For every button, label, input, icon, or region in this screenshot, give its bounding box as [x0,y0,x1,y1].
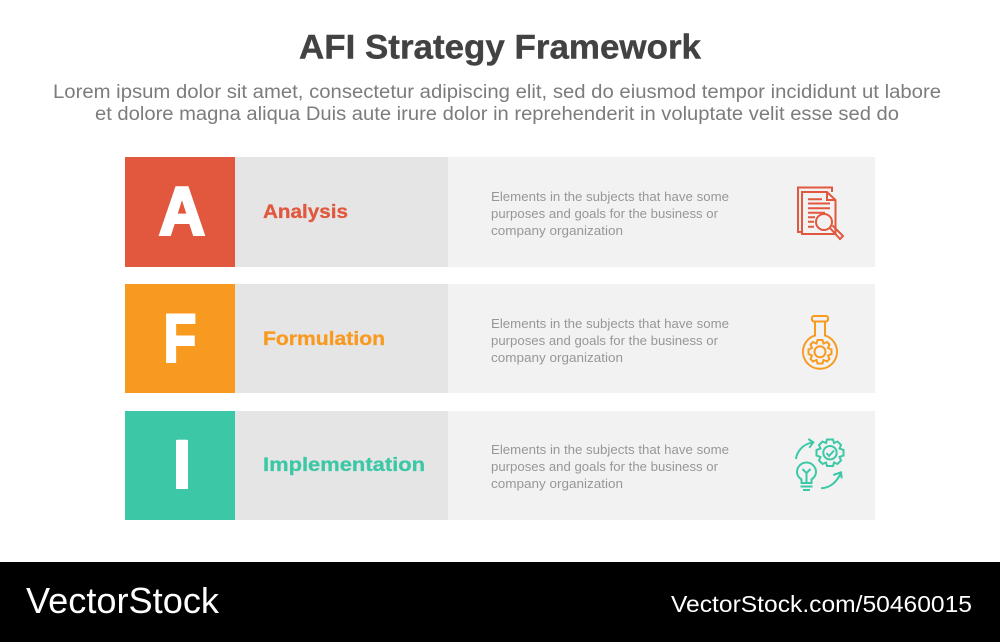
description: Analysis [491,189,729,238]
footer url text: VectorStock.com/50460015 [671,591,972,617]
letter tile: A: A [159,174,205,250]
panel: Analysis row [125,157,875,267]
heading: Formulation: Formulation [263,328,385,350]
description: Implementation: Elements in the subjects that have some [491,442,729,457]
heading: Implementation: Implementation [263,454,425,476]
panel: Formulation row [125,284,875,393]
description: Formulation: Elements in the subjects that have some [491,316,729,331]
description: Analysis: Elements in the subjects that have some [491,189,729,204]
description: Formulation: company organization [491,350,623,365]
letter tile: I: I [172,426,192,505]
letter tile: A [125,157,235,267]
description: Implementation: purposes and goals for the business or [491,459,719,474]
heading: Analysis: Analysis [263,201,348,223]
description: Analysis: purposes and goals for the business or [491,206,719,221]
letter tile: F [125,284,235,393]
description: Formulation [491,316,729,365]
subtitle text: et dolore magna aliqua Duis aute irure dolor in reprehenderit in voluptate velit esse sed do [95,104,899,125]
subtitle text [53,82,941,125]
description: Formulation: purposes and goals for the business or [491,333,719,348]
description: Analysis: company organization [491,223,623,238]
icon: flask with gear [803,316,837,369]
title: AFI Strategy Framework [299,28,701,66]
icon: document with magnifying glass [798,188,843,239]
panel: Implementation row [125,411,875,520]
letter tile: I [125,411,235,520]
footer logo text: VectorStock [26,580,220,621]
letter tile: F: F [164,300,196,376]
footer bar [0,562,1000,642]
description: Implementation: company organization [491,476,623,491]
icon: idea and gear cycle [796,439,844,490]
subtitle text: Lorem ipsum dolor sit amet, consectetur adipiscing elit, sed do eiusmod tempor incididunt ut labore [53,82,941,103]
description: Implementation [491,442,729,491]
